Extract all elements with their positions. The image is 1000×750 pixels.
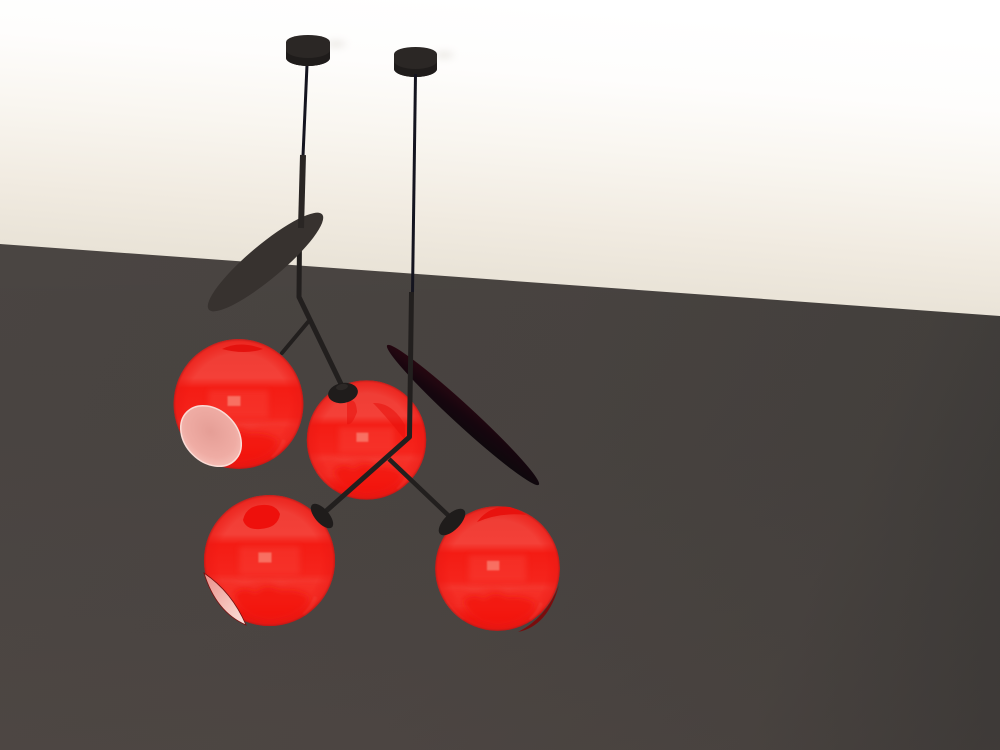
reflection spot bbox=[222, 344, 263, 352]
glass opening bbox=[518, 585, 559, 632]
globe: top left bbox=[169, 339, 304, 478]
left pendant: upper rod bbox=[301, 65, 307, 228]
right disc bbox=[380, 338, 546, 492]
right pendant: lower rod and arms bbox=[325, 292, 450, 517]
reflection shapes bbox=[347, 400, 405, 440]
socket: top centre bbox=[326, 381, 360, 405]
glass opening bbox=[204, 573, 246, 625]
canopy: right bbox=[394, 47, 437, 77]
ceiling bbox=[0, 0, 1000, 320]
left disc bbox=[198, 201, 333, 323]
socket: bottom left bbox=[307, 500, 337, 532]
wall bbox=[0, 244, 1000, 750]
globe: bottom right bbox=[435, 506, 560, 632]
reflection spot bbox=[477, 507, 526, 522]
glass opening bbox=[169, 394, 253, 478]
globe: bottom left bbox=[204, 495, 335, 626]
left pendant: lower rod and arms bbox=[282, 240, 342, 386]
reflection spot bbox=[243, 505, 280, 529]
canopy: left bbox=[286, 35, 330, 66]
ceiling shadows bbox=[326, 41, 454, 58]
socket: bottom right bbox=[434, 504, 470, 540]
right pendant: thin rod bbox=[412, 74, 416, 293]
globe: top centre bbox=[307, 380, 426, 500]
